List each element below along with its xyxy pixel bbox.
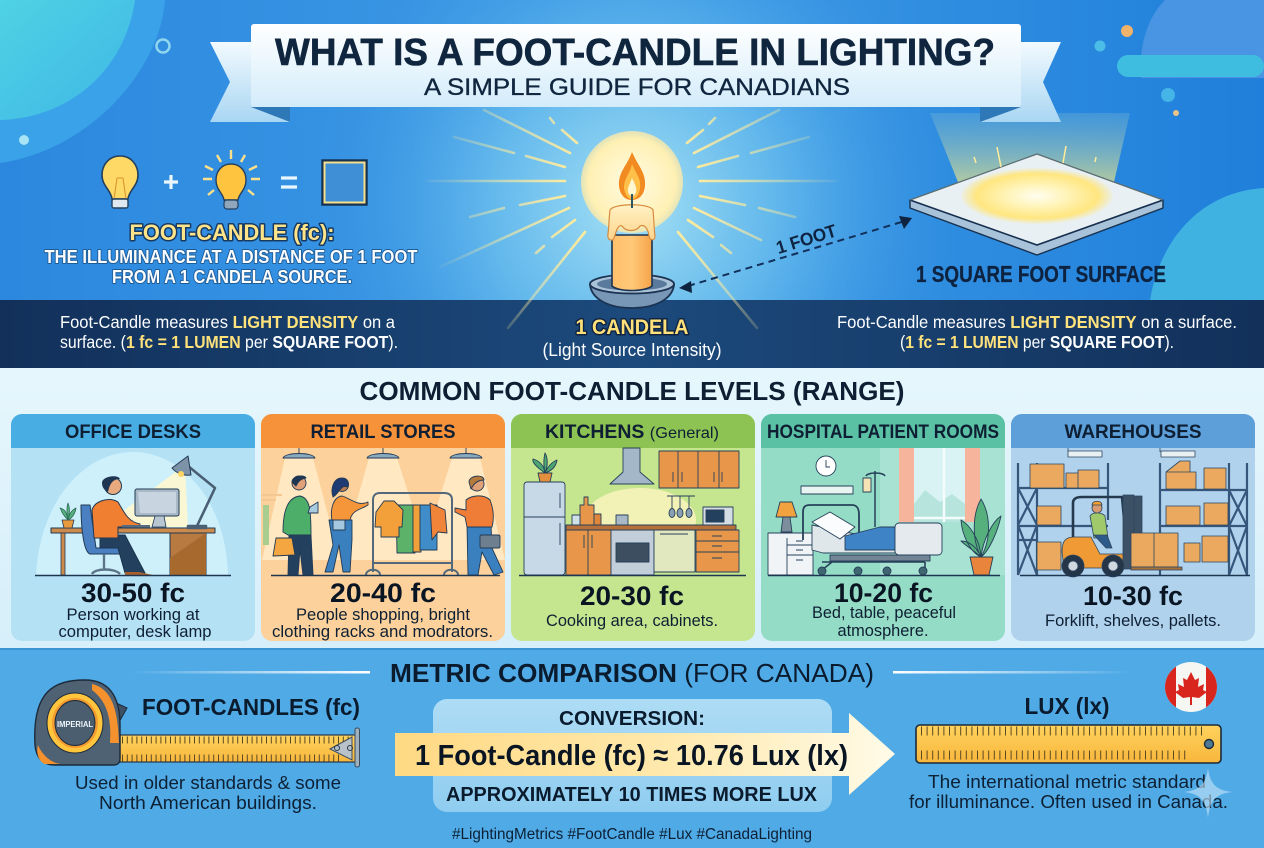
clothes [396,505,415,553]
retail heading: RETAIL STORES [310,422,456,443]
conversion note: APPROXIMATELY 10 TIMES MORE LUX [446,783,817,806]
wall panel [801,486,853,494]
ceiling lights [299,448,466,453]
levels heading: COMMON FOOT-CANDLE LEVELS (RANGE) [360,378,904,406]
forklift driver [1092,503,1102,513]
candle dish [590,285,674,308]
shopper one [288,535,313,575]
band text: left: surface. (1 fc = 1 LUMEN per SQUARE FOOT). [60,332,398,352]
band text: left: Foot-Candle measures LIGHT DENSITY on a [60,312,395,332]
icon: office worker scene [36,452,228,575]
one square foot surface [910,113,1166,287]
hospital heading: HOSPITAL PATIENT ROOMS [767,422,999,443]
potted plant [538,473,552,482]
icon: kitchen scene [524,448,739,575]
bedside lamp [776,502,797,517]
conversion formula: 1 Foot-Candle (fc) ≈ 10.76 Lux (lx) [415,740,848,772]
panel: retail stores [261,414,505,641]
office description: Person working at [66,606,200,624]
icon: hospital room scene [768,448,1005,575]
main title: WHAT IS A FOOT-CANDLE IN LIGHTING? [275,32,995,74]
icon: square [323,161,366,204]
nightstand [768,533,813,575]
pallet load [1131,533,1178,567]
retail description: People shopping, bright [296,606,470,624]
band text: candela: (Light Source Intensity) [542,340,722,360]
kitchens description: Cooking area, cabinets. [546,612,718,630]
icon: forklift and shelves scene [1018,448,1247,577]
band text: right: Foot-Candle measures LIGHT DENSITY on a surface. [837,312,1237,332]
title banner [210,24,1061,122]
band text: right [837,312,1237,352]
foot-candles label and description: North American buildings. [99,792,317,813]
icon: imperial tape measure [35,680,360,767]
desk lamp [188,466,215,528]
conversion heading: CONVERSION: [559,707,705,730]
window [914,448,965,522]
microwave [703,507,733,525]
lux description [909,771,1228,812]
icon: glowing bulb [203,150,260,209]
sparkle [1184,768,1232,818]
desk [51,528,215,533]
icon: equation bulb + bulb = square [102,150,366,209]
right boxes [1166,461,1228,562]
levels section background [0,368,1264,648]
icon: shoppers and clothing rack scene [261,448,505,575]
flame [619,152,645,200]
conversion panel [395,699,895,812]
plant [62,520,74,528]
panel: kitchens [511,414,755,641]
lux description: The international metric standard [928,771,1206,792]
foot-candles label and description: Used in older standards & some [75,772,341,793]
monitor [135,489,179,516]
worker [100,535,145,573]
band text: candela [542,316,722,360]
conversion arrow [395,713,895,795]
panel: retail stores: clothing racks and modrators. [272,623,493,641]
hashtags: #LightingMetrics #FootCandle #Lux #CanadaLighting [452,826,812,843]
icon: plain bulb [102,156,138,208]
warehouses value: 10-30 fc [1083,581,1183,611]
tape label: IMPERIAL [57,720,93,729]
lux label: LUX (lx) [1024,693,1110,719]
lower cabinets [566,530,611,575]
1 foot distance arrow [679,216,912,293]
metric section background [0,648,1264,848]
oven [611,530,654,575]
warehouses description: Forklift, shelves, pallets. [1045,612,1221,630]
band text: candela: 1 CANDELA [576,316,688,339]
retail value: 20-40 fc [330,578,436,608]
bed [803,505,859,540]
clock [816,456,836,476]
warehouses heading: WAREHOUSES [1064,422,1202,443]
keyboard [122,525,150,528]
wall cabinets [659,451,739,488]
pot, board, jars [616,515,628,525]
kitchens heading: KITCHENS (General) [545,422,719,443]
hospital description: Bed, table, peaceful [812,604,956,622]
office heading: OFFICE DESKS [65,422,201,443]
chair [81,505,124,554]
iv stand [866,471,885,527]
light rays around candle [427,110,836,328]
forklift [1062,537,1125,568]
definition text [44,220,418,287]
range hood [610,448,654,484]
clothing rack [373,493,452,572]
definition heading: FOOT-CANDLE (fc): [130,220,334,245]
hero background [0,0,1264,300]
definition line one: THE ILLUMINANCE AT A DISTANCE OF 1 FOOT [44,246,418,267]
dishwasher [654,530,695,572]
office value: 30-50 fc [81,578,185,608]
surface label: 1 SQUARE FOOT SURFACE [916,261,1166,287]
right shelves [1160,463,1247,575]
panel: office desks: computer, desk lamp [58,623,212,641]
melted wax top [608,205,655,240]
shopper three [467,525,503,575]
band text: right: (1 fc = 1 LUMEN per SQUARE FOOT). [900,332,1174,352]
panel: hospital patient rooms: atmosphere. [838,622,928,640]
lux description: for illuminance. Often used in Canada. [909,791,1228,812]
candle body [612,235,652,290]
potted plant [970,557,993,575]
left boxes [1030,464,1099,570]
band text: left [60,312,398,352]
panel: office desks [11,414,255,641]
hospital value: 10-20 fc [834,578,933,608]
panel: hospital patient rooms [761,414,1005,641]
subtitle: A SIMPLE GUIDE FOR CANADIANS [424,74,850,101]
panel: warehouses [1011,414,1255,641]
distance label: 1 FOOT [774,221,839,258]
dark caption band [0,300,1264,368]
icon: canadian flag [1165,662,1217,712]
shopper two [325,520,352,572]
icon: lux ruler [916,725,1221,763]
drawers [696,530,739,572]
left shelves [1018,463,1108,575]
candle with halo [581,131,683,308]
metric heading: METRIC COMPARISON (FOR CANADA) [390,658,874,688]
kitchens value: 20-30 fc [580,581,684,611]
foot-candles label and description [75,694,360,813]
definition line two: FROM A 1 CANDELA SOURCE. [112,266,352,287]
fridge [524,482,565,575]
foot-candles label and description: FOOT-CANDLES (fc) [142,694,360,720]
utensil rail [667,496,695,510]
counter [566,525,736,530]
